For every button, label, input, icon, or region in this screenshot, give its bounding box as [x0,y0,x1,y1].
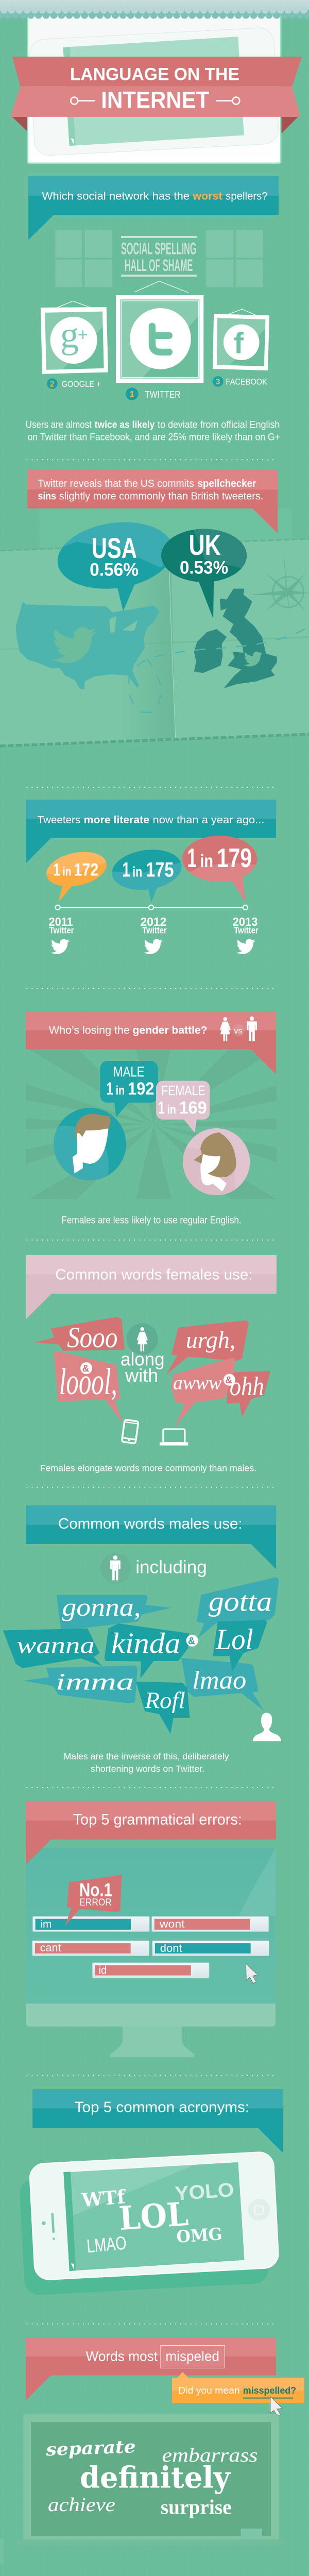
heading bubble: males [26,1505,276,1569]
sunburst behind faces [26,1049,277,1199]
heading bubble: gender battle: vs [234,1026,243,1036]
bubble: Sooo [35,1317,125,1354]
heading bubble: more literate: Tweeters [38,815,80,826]
heading bubble: grammatical errors [26,1801,276,1865]
panel: tweeters more literate timeline [26,787,276,928]
error field: cant [32,1941,149,1956]
bubble: No.1 error: No.1 [79,1879,112,1900]
word: definitely: definitely [80,2460,231,2495]
bubble: urgh: urgh, [186,1327,235,1353]
year labels: 2013 [233,915,258,928]
bubble: Lol: Lol [215,1623,253,1656]
caption: males shorten: shortening words on Twitter. [91,1764,204,1774]
Twitter labels: Twitter [234,925,259,935]
paragraph: twice as likely: twice as likely [95,419,155,430]
title text line two: INTERNET [101,87,210,113]
heading bubble: spellchecker sins [27,470,278,533]
panel: top 5 grammatical errors [26,1801,283,2153]
heading bubble: worst spellers [28,176,279,240]
bubble: 1 in 175 [112,850,182,903]
bubble: UK 0.53%: UK [189,529,221,561]
rank label: Google plus [47,378,101,389]
ornament right [216,97,239,104]
bubble: Rofl: Rofl [144,1687,185,1714]
bubble: gonna: gonna, [62,1593,141,1621]
title text: LANGUAGE ON THE [70,64,239,84]
word: achieve: achieve [48,2494,115,2516]
scalloped top edge [0,0,309,15]
text: LMAO: LMAO [86,2232,127,2257]
bubble: lmao [181,1658,264,1711]
bubble: male 1 in 192: MALE [113,1064,144,1080]
bubble: USA 0.56% [58,522,170,611]
word: embarrass: embarrass [162,2445,258,2466]
paragraph: twice as likely [26,419,280,443]
hall of shame windows [55,230,263,287]
title ribbon [10,57,302,133]
error field: dont: dont [160,1942,182,1954]
icon: male in circle [100,1553,131,1584]
bubble: 1 in 175: 175 [146,858,174,881]
timeline [56,905,248,910]
map: UK and Ireland [194,589,277,688]
bubble: 1 in 172: in [62,865,72,878]
tooltip: did you mean [172,2372,304,2403]
ornament left [71,97,95,104]
heading bubble: gender battle: gender battle? [133,1024,208,1037]
icon: bird on UK [244,652,263,667]
bubble: gotta [197,1577,279,1638]
icon: bird on USA [52,628,96,663]
word: separate: separate [45,2436,136,2460]
bubble: UK 0.53%: 0.53% [180,558,228,578]
panel: chalkboard words and emoticons [0,2465,284,2564]
panel: header with phone and title [0,0,309,287]
rank label: Twitter [126,387,181,400]
bubble: male 1 in 192: 1 [107,1079,113,1098]
text: along with: along [121,1349,165,1370]
text: OMG: OMG [176,2224,223,2247]
bubble: awww [171,1358,235,1428]
heading bubble: spellchecker sins: sins [38,490,56,502]
heading bubble: words mispeled: mispeled [165,2349,219,2364]
icon: laptop [160,1429,188,1446]
bubble: kinda [105,1623,198,1679]
bubble: ohh: ohh [230,1372,264,1401]
bubble: loool: loool, [59,1361,117,1402]
bubble: 1 in 179 [181,835,258,903]
bubble: lmao: lmao [192,1666,246,1694]
tooltip: did you mean: misspelled? [243,2385,296,2396]
error field: im [33,1917,149,1931]
heading bubble: gender battle [26,1011,276,1074]
icon: phone [122,1419,139,1444]
panel: acronyms phone and misspelled words [18,2151,304,2540]
text: LOL: LOL [118,2195,190,2238]
bubble: female 1 in 169 [156,1081,210,1133]
bubble: 1 in 179: 1 [187,843,197,873]
frame: Google plus: g [60,314,79,356]
paragraph: twice as likely: on Twitter than Facebook, and are 25% more likely than on G+ [28,432,280,443]
frame: Twitter [116,281,203,383]
heading bubble: acronyms: Top 5 common acronyms: [75,2099,249,2116]
caption: males shorten: Males are the inverse of this, deliberately [64,1751,229,1761]
heading bubble: spellchecker sins: slightly more commonly than British tweeters. [59,490,263,502]
rank label: Twitter: 1 [129,389,134,399]
chalkboard [23,2414,279,2540]
heading bubble: worst spellers: worst [192,190,222,202]
heading bubble: males: Common words males use: [58,1515,243,1532]
frame: Google plus: + [78,325,88,345]
bubble: 1 in 172: 172 [74,860,98,879]
rank label: Google plus: GOOGLE + [61,379,101,389]
hero card with phone [28,12,281,163]
phone with acronyms [18,2151,280,2296]
hall of shame sign [121,236,197,277]
bubble: awww: awww [173,1372,222,1394]
heading bubble: spellchecker sins: Twitter reveals that the US commits [38,478,194,489]
bubble: imma [23,1666,138,1703]
rank label: Facebook [213,376,268,387]
icon: male [247,1016,257,1041]
caption: elongate: Females elongate words more commonly than males. [40,1463,256,1473]
bubble: female 1 in 169: 169 [179,1098,207,1118]
heading bubble: more literate: now than a year ago... [153,815,265,826]
bubble: No.1 error: ERROR [79,1897,112,1908]
heading bubble: words mispeled: Words most [85,2349,158,2364]
icon: three birds [51,939,255,954]
Twitter labels: Twitter [49,925,74,935]
map: USA [16,601,160,689]
Twitter labels: Twitter [142,925,167,935]
text: including: including [135,1557,207,1578]
heading bubble: acronyms [32,2089,283,2153]
bubble: urgh [166,1320,249,1375]
text: along with: with [125,1365,158,1386]
bubble: Sooo: Sooo [67,1321,117,1354]
heading bubble: grammatical errors: Top 5 grammatical errors: [73,1811,242,1828]
heading bubble: more literate [26,800,276,863]
bubble: Rofl [136,1682,190,1734]
bubble: gotta: gotta [209,1586,272,1617]
tooltip: did you mean: Did you mean [178,2385,240,2396]
panel: common words males use [3,1553,281,1788]
bubble: wanna: wanna [17,1632,95,1658]
error field: im: im [40,1918,52,1930]
Twitter labels [49,925,259,935]
bubble: UK 0.53% [161,526,250,619]
bubble: No.1 error [65,1875,122,1926]
bubble: USA 0.56%: 0.56% [90,560,139,580]
error field: wont [152,1917,269,1931]
bubble: kinda: & [188,1636,195,1647]
error field: id: id [98,1964,107,1976]
error field: wont: wont [159,1918,185,1930]
bubble: female 1 in 169: 1 [158,1098,165,1118]
year labels: 2011 [49,915,73,928]
hall of shame sign: SOCIAL SPELLING [121,240,197,258]
paragraph: twice as likely: to deviate from official English [158,419,280,430]
bubble: male 1 in 192 [100,1061,158,1117]
error field: cant: cant [40,1941,61,1954]
caption: females: Females are less likely to use regular English. [61,1215,242,1226]
panel: gender battle [26,925,277,1226]
icon: female in circle [127,1323,158,1355]
heading bubble: more literate: more literate [84,815,149,826]
heading bubble: words mispeled [26,2337,276,2400]
map panel with USA and UK [0,509,309,747]
bubble: kinda: kinda [111,1628,180,1660]
bubble: 1 in 172: 1 [53,860,60,879]
heading bubble: gender battle: Who’s losing the [49,1024,130,1037]
error field: dont [152,1941,269,1956]
bubble: female 1 in 169: FEMALE [161,1083,205,1098]
chalk ledge and eraser [0,2529,285,2564]
bubble: male 1 in 192: in [116,1084,125,1097]
bubble: wanna [3,1629,102,1668]
rank label: Twitter: TWITTER [145,389,181,400]
bubble: 1 in 179: 179 [217,843,252,873]
error field: id [92,1963,209,1978]
bubble: awww: & [225,1375,232,1386]
bubble: 1 in 179: in [200,851,213,871]
rank label: Facebook: FACEBOOK [226,377,268,387]
year labels [49,915,258,928]
flight path marks [98,621,304,713]
bubble: 1 in 172 [46,852,107,902]
bubble: female 1 in 169: in [167,1104,176,1117]
heading bubble: females: Common words females use: [55,1266,253,1282]
heading bubble: worst spellers: spellers? [226,190,268,202]
frame: Google plus [41,301,108,374]
hall of shame sign: HALL OF SHAME [125,256,193,275]
rank label: Google plus: 2 [50,379,55,388]
paragraph: twice as likely: Users are almost [26,419,92,430]
male face circle [54,1108,126,1180]
bubble: Lol [213,1620,267,1672]
bubble: gonna [57,1593,171,1631]
bubble: loool [54,1351,123,1423]
rank label: Facebook: 3 [216,377,220,386]
text: along with [121,1349,165,1386]
panel: common words females use [26,1240,277,1569]
panel: social network ranking and map [0,281,309,747]
bubble: USA 0.56%: USA [92,532,137,564]
text: WTF: WTf [80,2185,127,2211]
icon: female [220,1017,231,1041]
heading bubble: worst spellers: Which social network has the [42,190,190,202]
compass rose [249,548,309,617]
frame: Facebook [213,309,269,370]
bubble: imma: imma [56,1668,134,1694]
year labels: 2012 [140,915,166,928]
icon: cursor [246,1964,258,1983]
bubble: loool: & [82,1363,90,1374]
female face circle [183,1128,250,1195]
bubble: 1 in 175: 1 [122,858,130,881]
heading bubble: spellchecker sins: spellchecker [197,478,256,489]
heading bubble: females [26,1255,277,1319]
icon: cursor [270,2397,282,2416]
bubble: ohh [227,1371,270,1417]
bubble: male 1 in 192: 192 [128,1079,154,1098]
caption: males shorten [64,1751,229,1774]
word: surprise: surprise [161,2496,232,2519]
bubble: 1 in 175: in [132,863,142,879]
frame: Facebook: f [234,327,244,360]
text: YOLO: YOLO [174,2179,235,2205]
icon: male silhouette [253,1713,281,1741]
monitor [26,1848,276,2057]
